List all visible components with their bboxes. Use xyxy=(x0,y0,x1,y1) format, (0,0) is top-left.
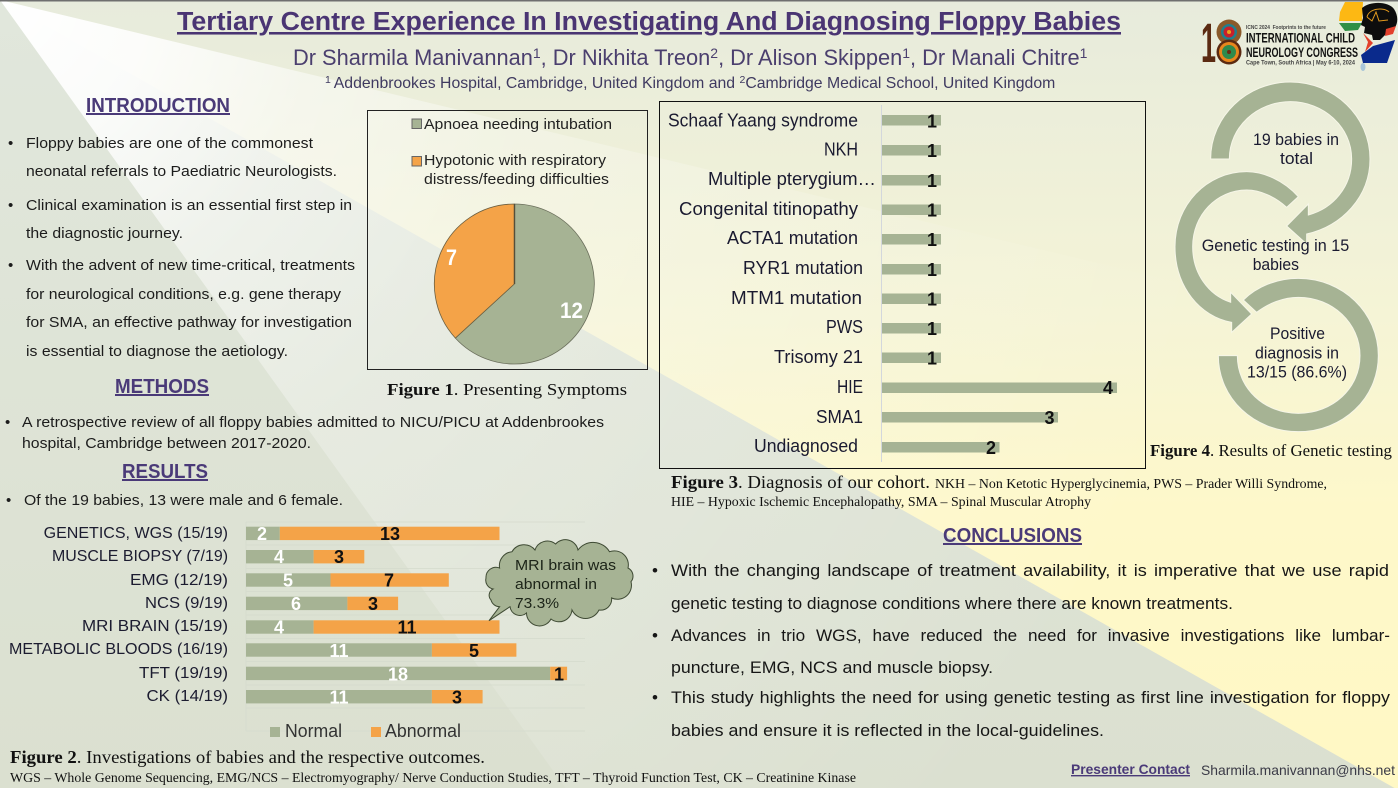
text block: methods: hospital, Cambridge between 2017-2020. xyxy=(22,435,311,452)
data labels: 1 xyxy=(927,112,937,132)
data labels: 3 xyxy=(452,688,462,708)
affiliations: 1 xyxy=(325,74,334,86)
heading: methods: METHODS xyxy=(115,376,209,398)
authors: 1 xyxy=(533,45,541,61)
text block: conclusions xyxy=(652,561,1391,740)
text: flow steps: Positive xyxy=(1270,325,1325,343)
presenter contact: Sharmila.manivannan@nhs.net xyxy=(1201,762,1395,778)
authors xyxy=(293,45,1088,70)
text: flow steps: Genetic testing in 15 xyxy=(1202,237,1349,255)
text: flow steps: diagnosis in xyxy=(1255,344,1339,362)
data labels: 11 xyxy=(329,641,349,661)
category labels: EMG (12/19) xyxy=(130,572,228,589)
text: flow steps: babies xyxy=(1253,256,1299,274)
category labels: Congenital titinopathy xyxy=(679,199,858,219)
text block: introduction xyxy=(8,135,355,360)
abnormal bars xyxy=(280,527,567,703)
caption: figure 3: Figure 3 . Diagnosis of our cohort. xyxy=(671,472,930,492)
text block: introduction: • xyxy=(8,257,13,274)
legend: symptoms: distress/feeding difficulties xyxy=(424,171,609,188)
category labels: MRI BRAIN (15/19) xyxy=(82,618,228,635)
icon: congress logo: 1 xyxy=(1201,11,1216,74)
data labels: 2 xyxy=(986,438,996,458)
text block: results: • xyxy=(6,492,11,509)
text block: conclusions: • xyxy=(652,688,658,707)
icon: congress logo: Cape Town, South Africa | May 6-10, 2024 xyxy=(1246,60,1356,66)
data labels: 1 xyxy=(927,200,937,220)
legend: normal and abnormal: Normal xyxy=(285,720,342,741)
arrow: total babies ring xyxy=(1211,82,1370,244)
caption: figure 3: HIE – Hypoxic Ischemic Encephalopathy, SMA – Spinal Muscular Atrophy xyxy=(671,494,1091,509)
arrow: genetic testing ring xyxy=(1175,172,1298,332)
text block: conclusions: • xyxy=(652,626,658,645)
text block: introduction: neonatal referrals to Paediatric Neurologists. xyxy=(26,163,337,180)
category labels xyxy=(9,525,228,705)
affiliations xyxy=(325,74,1055,92)
category labels: ACTA1 mutation xyxy=(727,228,858,248)
text block: conclusions: puncture, EMG, NCS and muscle biopsy. xyxy=(671,658,993,677)
pie chart xyxy=(434,204,594,364)
bars xyxy=(882,115,1117,452)
data labels: 4 xyxy=(274,618,284,638)
data labels: 3 xyxy=(368,594,378,614)
panel: pie chart figure 1 xyxy=(368,110,648,370)
text block: results: Of the 19 babies, 13 were male and 6 female. xyxy=(24,492,343,509)
category labels: HIE xyxy=(837,377,863,397)
icon: congress logo xyxy=(1201,2,1397,74)
data labels: 13 xyxy=(380,524,400,544)
caption: figure 4: Figure 4. Results of Genetic testing xyxy=(1150,441,1392,460)
text: flow steps: total xyxy=(1280,150,1313,168)
category labels: GENETICS, WGS (15/19) xyxy=(44,525,228,542)
text block: introduction: for neurological conditions, e.g. gene therapy xyxy=(26,286,342,303)
data labels: 1 xyxy=(927,260,937,280)
callout: MRI brain: abnormal in xyxy=(515,576,597,593)
category labels: Schaaf Yaang syndrome xyxy=(668,110,858,130)
legend: symptoms xyxy=(412,116,612,188)
data labels: 5 xyxy=(469,641,479,661)
data labels: 1 xyxy=(927,171,937,191)
category labels: METABOLIC BLOODS (16/19) xyxy=(9,641,228,658)
data labels: 11 xyxy=(397,618,417,638)
data labels: 1 xyxy=(554,664,564,684)
text block: introduction: • xyxy=(8,135,13,152)
data labels: 1 xyxy=(927,348,937,368)
category labels: NKH xyxy=(824,140,858,160)
legend: normal and abnormal: Abnormal xyxy=(385,720,461,741)
callout: MRI brain xyxy=(486,540,633,626)
category labels: PWS xyxy=(826,317,863,337)
text: flow steps: 19 babies in xyxy=(1253,131,1339,149)
callout: MRI brain: MRI brain was xyxy=(515,557,616,574)
heading: introduction: INTRODUCTION xyxy=(86,95,230,117)
authors: 1 xyxy=(902,45,910,61)
category labels: TFT (19/19) xyxy=(139,665,228,682)
text block: introduction: is essential to diagnose the aetiology. xyxy=(26,343,288,360)
data labels: 5 xyxy=(283,570,293,590)
data labels: 4 xyxy=(1103,378,1113,398)
caption: figure 2: WGS – Whole Genome Sequencing, EMG/NCS – Electromyography/ Nerve Conduction Studies, TFT – Thyroid Function Test, CK – Creatinine Kinase xyxy=(10,770,856,785)
text: flow steps: 13/15 (86.6%) xyxy=(1247,364,1347,382)
caption: figure 3 xyxy=(671,472,1327,509)
authors: Dr Sharmila Manivannan xyxy=(293,45,533,70)
text: flow steps xyxy=(1202,131,1349,382)
data labels: 1 xyxy=(927,319,937,339)
category labels: SMA1 xyxy=(816,407,863,427)
text block: methods: A retrospective review of all floppy babies admitted to NICU/PICU at Addenbrookes xyxy=(22,414,604,431)
presenter contact xyxy=(1071,761,1395,778)
icon: congress logo: ICNC 2024 Footprints to the future xyxy=(1246,25,1326,31)
authors: , Dr Manali Chitre xyxy=(910,45,1080,70)
legend: symptoms: Hypotonic with respiratory xyxy=(424,152,607,169)
authors: , Dr Alison Skippen xyxy=(718,45,902,70)
category labels: RYR1 mutation xyxy=(743,258,863,278)
category labels: NCS (9/19) xyxy=(145,595,228,612)
callout: MRI brain: 73.3% xyxy=(515,595,559,612)
text block: introduction: Floppy babies are one of the commonest xyxy=(26,135,314,152)
panel: bar chart figure 3 xyxy=(660,102,1146,468)
pie chart: 12 xyxy=(560,298,583,323)
flow diagram: results of genetic testing xyxy=(1175,82,1378,432)
text block: methods: • xyxy=(5,414,10,431)
authors: 1 xyxy=(1080,45,1088,61)
text block: introduction: Clinical examination is an essential first step in xyxy=(26,197,352,214)
arrow: positive diagnosis ring xyxy=(1218,278,1378,432)
heading: conclusions: CONCLUSIONS xyxy=(943,525,1082,547)
icon: congress logo: INTERNATIONAL CHILD xyxy=(1246,30,1355,46)
authors: 2 xyxy=(710,45,718,61)
affiliations: Addenbrookes Hospital, Cambridge, United Kingdom and xyxy=(334,75,739,92)
text block: introduction: for SMA, an effective pathway for investigation xyxy=(26,314,352,331)
legend: normal and abnormal xyxy=(270,720,461,741)
data labels: 18 xyxy=(388,664,408,684)
data labels: 6 xyxy=(291,594,301,614)
caption: figure 2 xyxy=(10,747,856,785)
data labels: 11 xyxy=(329,688,349,708)
affiliations: 2 xyxy=(739,74,745,86)
legend: symptoms: Apnoea needing intubation xyxy=(424,116,612,133)
category labels: MTM1 mutation xyxy=(731,288,862,308)
title: Tertiary Centre Experience In Investigating And Diagnosing Floppy Babies xyxy=(177,8,1121,36)
presenter contact: Presenter Contact xyxy=(1071,761,1190,777)
category labels xyxy=(668,110,876,456)
data labels: 3 xyxy=(1044,408,1055,428)
text block: conclusions: Advances in trio WGS, have reduced the need for invasive investigations like lumbar- xyxy=(671,626,1390,645)
data labels: 7 xyxy=(384,570,394,590)
category labels: CK (14/19) xyxy=(146,688,228,705)
panel: stacked bar chart figure 2 xyxy=(9,522,585,741)
data labels: 1 xyxy=(927,290,937,310)
caption: figure 3: NKH – Non Ketotic Hyperglycinemia, PWS – Prader Willi Syndrome, xyxy=(935,476,1327,491)
text block: introduction: • xyxy=(8,197,13,214)
caption: figure 2: Figure 2 . Investigations of babies and the respective outcomes. xyxy=(10,747,485,767)
text block: conclusions: This study highlights the need for using genetic testing as first line investigation for floppy xyxy=(671,688,1391,707)
affiliations: Cambridge Medical School, United Kingdom xyxy=(745,75,1055,92)
data labels: 2 xyxy=(257,524,267,544)
data labels xyxy=(257,524,564,708)
category labels: MUSCLE BIOPSY (7/19) xyxy=(52,548,228,565)
text block: conclusions: genetic testing to diagnose conditions where there are known treatments. xyxy=(671,594,1233,613)
normal bars xyxy=(246,527,550,703)
text block: methods xyxy=(5,414,604,452)
text block: introduction: With the advent of new time-critical, treatments xyxy=(26,257,355,274)
caption: figure 1: Figure 1 . Presenting Symptoms xyxy=(387,380,627,399)
pie chart: 7 xyxy=(446,245,457,270)
data labels xyxy=(927,112,1113,458)
category labels: Multiple pterygium… xyxy=(708,169,876,189)
data labels: 4 xyxy=(274,547,284,567)
category labels: Undiagnosed xyxy=(754,436,858,456)
text block: conclusions: • xyxy=(652,561,658,580)
category labels: Trisomy 21 xyxy=(774,347,863,367)
authors: , Dr Nikhita Treon xyxy=(541,45,710,70)
text block: conclusions: With the changing landscape of treatment availability, it is imperative that we use rapid xyxy=(671,561,1389,580)
data labels: 3 xyxy=(334,547,344,567)
text block: introduction: the diagnostic journey. xyxy=(26,225,183,242)
heading: results: RESULTS xyxy=(122,461,208,483)
text block: conclusions: babies and ensure it is reflected in the local-guidelines. xyxy=(671,721,1104,740)
data labels: 1 xyxy=(927,141,937,161)
data labels: 1 xyxy=(927,230,937,250)
